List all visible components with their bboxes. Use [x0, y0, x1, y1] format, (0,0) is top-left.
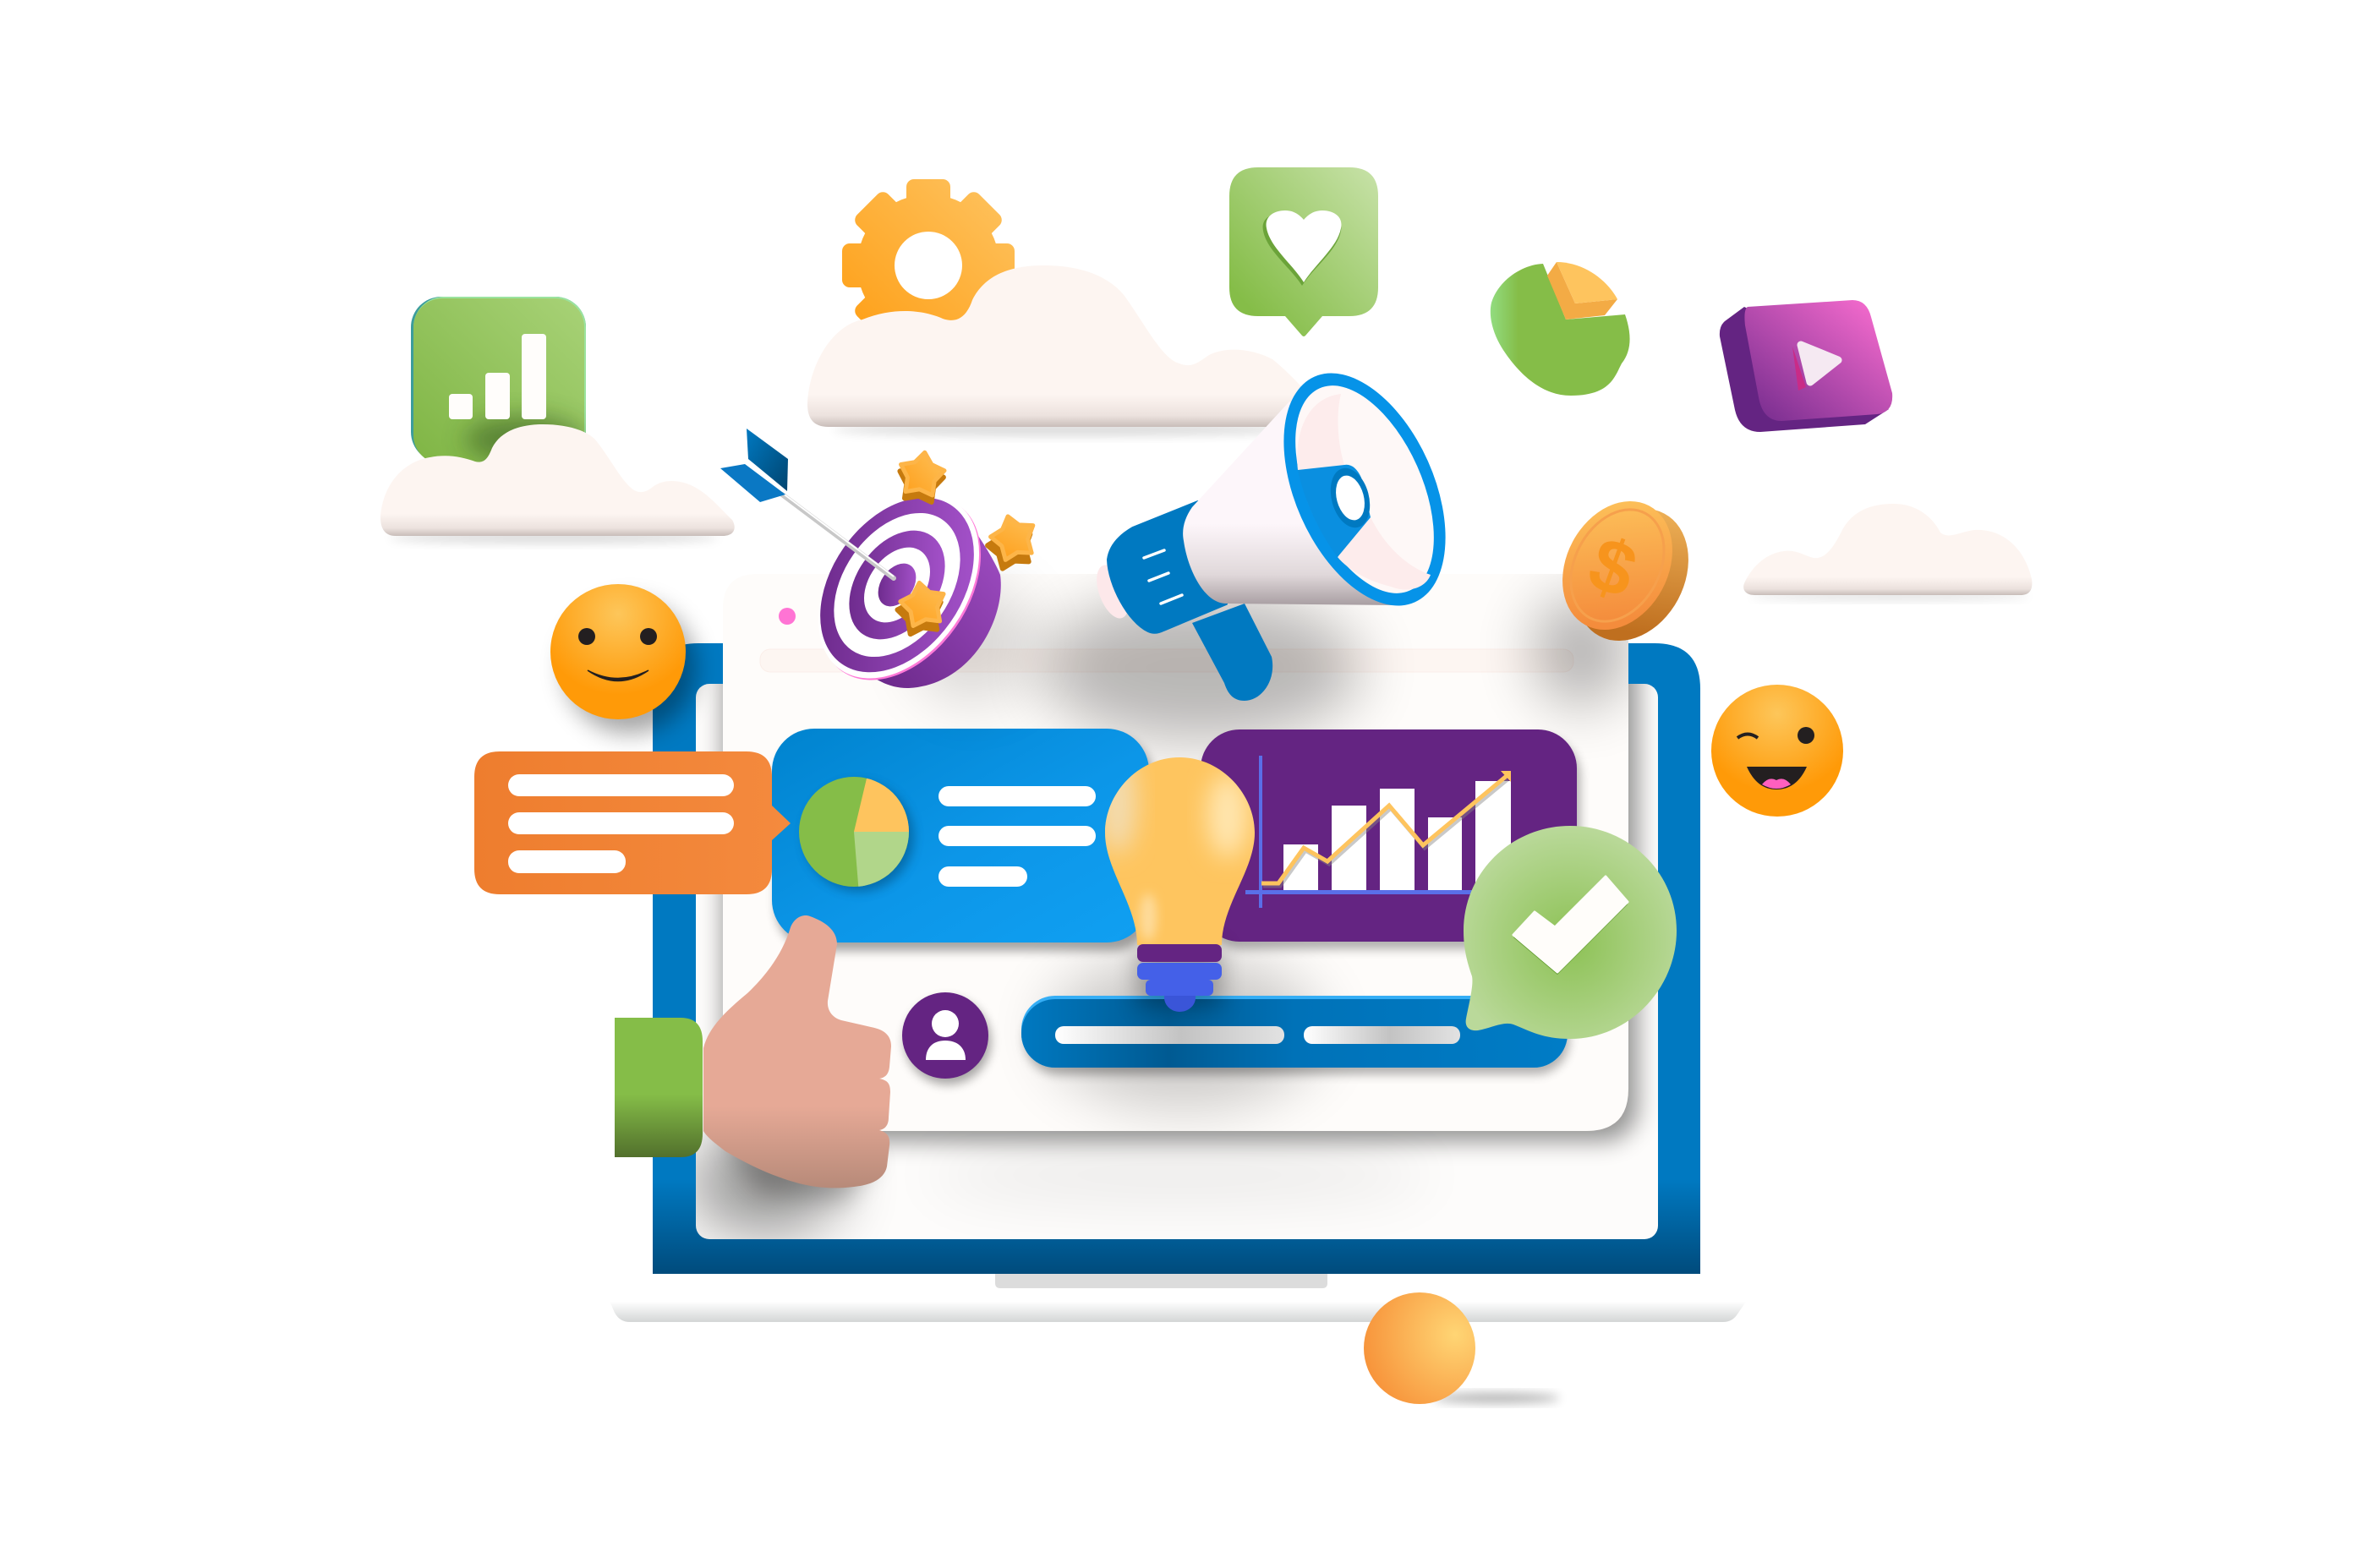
- cloud: [380, 424, 735, 536]
- star top: [896, 450, 947, 503]
- wink eye: [1737, 734, 1758, 738]
- bulb tip: [1164, 994, 1196, 1012]
- pill rim: [1021, 996, 1568, 1068]
- hand shadow: [719, 1141, 879, 1200]
- bulb glass: [1105, 757, 1255, 945]
- pill body: [1021, 999, 1568, 1068]
- target body: [845, 507, 1001, 688]
- target with arrow and stars: [720, 429, 1042, 710]
- dollar sign: $: [1579, 521, 1647, 615]
- cloud: [1743, 504, 2032, 595]
- open eye: [1798, 727, 1814, 744]
- ball shadow: [1433, 1393, 1560, 1403]
- target pink edge: [787, 467, 1014, 710]
- orange speech bubble: [474, 751, 791, 894]
- purple chart card: [1201, 729, 1580, 949]
- pill lines: [1055, 1026, 1460, 1044]
- browser window panel: [723, 574, 1628, 1131]
- laptop screen: [696, 684, 1658, 1239]
- avatar disc: [902, 992, 988, 1079]
- megaphone handle: [1108, 502, 1226, 632]
- check shadow: [1513, 879, 1628, 975]
- window inner shadows: [1040, 596, 1628, 1107]
- card body: [1229, 167, 1378, 336]
- heart speech card: [1229, 167, 1378, 336]
- arrow shaft: [782, 494, 894, 578]
- megaphone dashes: [1144, 550, 1182, 604]
- megaphone rim: [1251, 348, 1478, 631]
- bubble body: [474, 751, 791, 894]
- coin face: [1540, 482, 1694, 649]
- play triangle: [1801, 345, 1838, 382]
- pie body: [1491, 264, 1630, 396]
- purple card shadow: [1204, 737, 1580, 949]
- bulb band upper: [1137, 944, 1222, 962]
- smiley face: [550, 584, 686, 719]
- laptop blue frame: [653, 643, 1700, 1274]
- bouncing ball: [1364, 1292, 1560, 1404]
- bottom blue pill: [1021, 996, 1569, 1074]
- trend line: [1261, 771, 1511, 886]
- laptop base: [609, 1299, 1748, 1322]
- check speech bubble: [1464, 826, 1677, 1039]
- ball: [1364, 1292, 1475, 1404]
- smiley mouth: [588, 670, 648, 681]
- megaphone speaker: [1324, 464, 1376, 532]
- arrow: [720, 429, 894, 578]
- pie chart: [799, 777, 919, 897]
- user avatar: [902, 992, 991, 1084]
- window dot: [779, 608, 796, 625]
- star bottom: [894, 579, 949, 636]
- megaphone back cap: [1091, 561, 1135, 622]
- cloud: [807, 265, 1327, 427]
- mouth: [1747, 767, 1807, 789]
- heart shadow: [1263, 213, 1341, 286]
- target rings: [789, 468, 1005, 702]
- tile side: [1720, 307, 1889, 432]
- megaphone cone: [1298, 465, 1371, 557]
- play triangle shadow: [1792, 347, 1806, 391]
- pie slice side: [1547, 262, 1617, 320]
- pie slice top: [1557, 262, 1617, 303]
- card text lines: [938, 786, 1096, 887]
- megaphone: [1091, 348, 1478, 701]
- bulb shadow: [1137, 947, 1222, 1006]
- avatar head: [932, 1010, 959, 1037]
- gear icon: [842, 179, 1015, 320]
- smiley shadow: [564, 602, 696, 734]
- chart axes: [1245, 756, 1478, 908]
- cloud shadow: [389, 532, 719, 544]
- bulb highlights: [1099, 752, 1248, 941]
- blue card body: [772, 729, 1149, 942]
- check mark: [1513, 877, 1628, 972]
- cloud top with gear: [807, 169, 1327, 436]
- lightbulb: [1099, 752, 1255, 1012]
- pill shadow: [1025, 1004, 1569, 1074]
- bulb band lower: [1146, 980, 1213, 996]
- tongue: [1762, 779, 1791, 789]
- thumbs up hand: [615, 915, 891, 1200]
- play tile icon: [1720, 300, 1892, 432]
- search bar: [760, 649, 1573, 672]
- cloud shadow: [833, 423, 1298, 436]
- blue card shadow: [776, 737, 1153, 951]
- smiley left: [550, 584, 696, 734]
- arrow feather lower: [720, 464, 785, 502]
- coin ring: [1552, 494, 1683, 637]
- bulb band middle: [1137, 963, 1222, 980]
- megaphone inner pink: [1338, 517, 1431, 590]
- smiley face: [1711, 685, 1843, 817]
- megaphone stand: [1192, 604, 1272, 701]
- bubble lines: [508, 774, 734, 873]
- window shadow on screen: [696, 684, 1654, 1239]
- window body: [723, 574, 1628, 1131]
- dollar coin: [1540, 482, 1710, 661]
- bubble body: [1464, 826, 1677, 1039]
- purple card body: [1201, 729, 1577, 942]
- cloud shadow: [1750, 592, 2029, 600]
- 3D pie icon: [1491, 262, 1630, 396]
- arrow feather upper: [747, 429, 788, 491]
- cloud left with bar card: [380, 297, 735, 544]
- cloud right: [1743, 504, 2032, 600]
- coin side: [1553, 489, 1710, 661]
- avatar body: [926, 1041, 966, 1060]
- illustration: laptop with marketing icons: [380, 167, 2033, 1408]
- heart: [1267, 210, 1341, 282]
- tile face: [1744, 300, 1892, 421]
- chart bars: [1283, 781, 1511, 890]
- laptop: [609, 592, 1748, 1322]
- megaphone horn: [1183, 402, 1399, 605]
- green bar card: [411, 297, 586, 464]
- avatar shadow: [905, 998, 991, 1084]
- target shadow: [913, 583, 1031, 702]
- target face: [785, 465, 1012, 708]
- blue card: [772, 729, 1153, 951]
- star right: [982, 511, 1042, 571]
- smiley eyes: [578, 628, 657, 645]
- megaphone inner: [1267, 365, 1462, 614]
- bars: [449, 334, 546, 419]
- sleeve: [615, 1018, 703, 1157]
- smiley right winking: [1711, 685, 1843, 817]
- hand: [703, 915, 891, 1188]
- laptop notch: [995, 1274, 1327, 1288]
